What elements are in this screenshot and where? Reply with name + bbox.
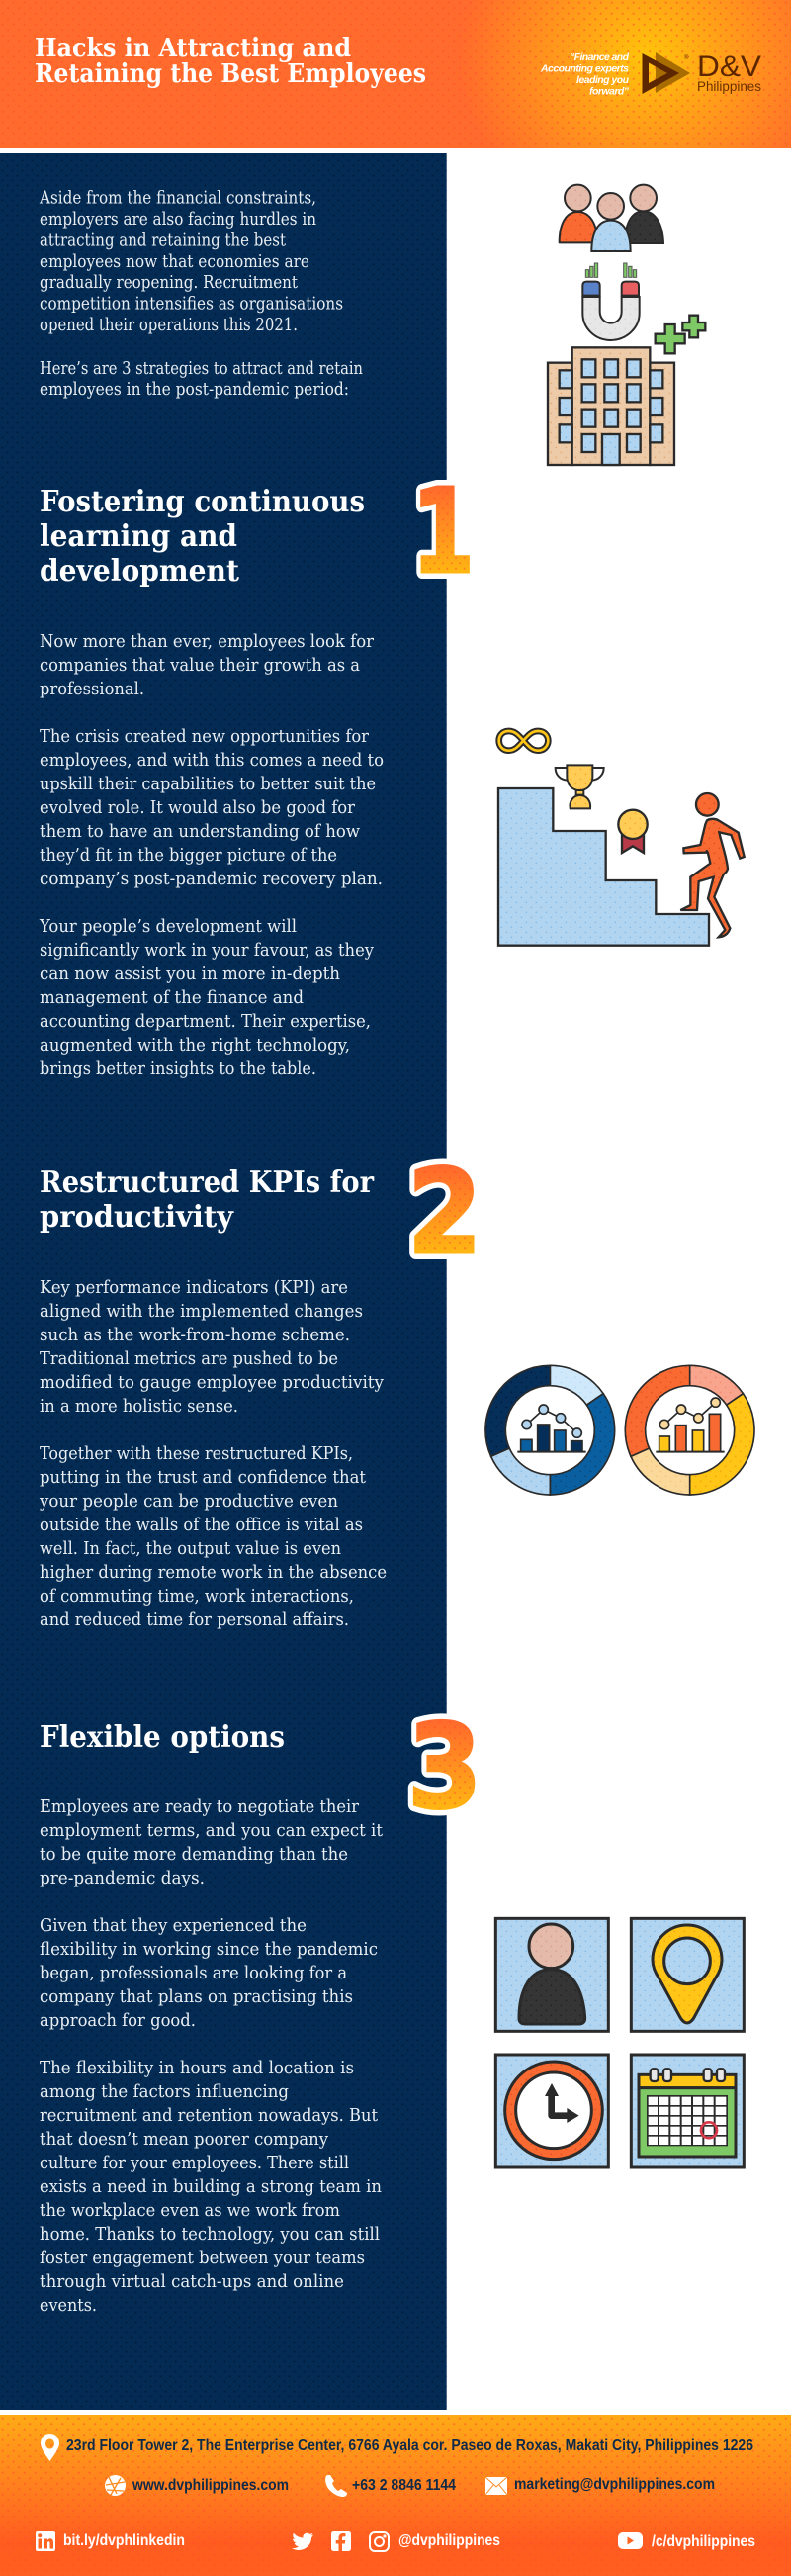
body: section 3: that doesn’t mean poorer company [40,2129,329,2150]
logo: D&V Philippines: Philippines [697,78,761,94]
intro text: employers are also facing hurdles in [40,209,316,230]
body: section 3: foster engagement between your teams [40,2248,365,2268]
intro text: attracting and retaining the best [40,230,287,250]
icon: globe [105,2475,126,2496]
number 3: 3 [407,1700,483,1835]
icon: location pin tile [631,1918,744,2031]
tagline: leading you [576,74,630,86]
icon: phone [325,2475,347,2497]
email: marketing@dvphilippines.com [514,2476,715,2493]
icon: plus signs [656,316,705,353]
heading: section 2: Restructured KPIs for [40,1165,375,1200]
number 1: 1 [411,464,475,599]
number 1: 1 [411,464,475,599]
body: section 1 [39,631,384,1079]
intro text: opened their operations this 2021. [40,315,298,335]
number 3: 3 [407,1700,483,1835]
body: section 1: upskill their capabilities to better suit the [40,774,376,794]
footer band [0,2415,791,2576]
linkedin handle: bit.ly/dvphlinkedin [63,2532,185,2549]
body: section 3: pre-pandemic days. [40,1868,205,1888]
body: section 3: Given that they experienced the [40,1915,307,1936]
number 2: 2 [407,1145,483,1280]
body: section 3: events. [40,2295,97,2316]
body: section 1: company’s post-pandemic recovery plan. [40,869,383,889]
body: section 3: through virtual catch-ups and online [40,2271,344,2292]
body: section 1: significantly work in your favour, as they [40,940,375,961]
panel: navy article column [0,153,447,2410]
heading: section 1: development [40,554,239,589]
title: Retaining the Best Employees [35,59,426,89]
icon: climbing stairs to achievement [498,731,745,946]
body: section 2 [39,1277,387,1630]
logo: D&V Philippines: ® [684,54,689,61]
body: section 2: Traditional metrics are pushed to be [40,1348,338,1369]
body: section 1: accounting department. Their expertise, [40,1011,371,1032]
body: section 1: professional. [40,679,144,699]
chart icon: orange donut with bars [625,1365,754,1495]
icon: mail [485,2477,507,2495]
body: section 1: management of the finance and [40,987,304,1008]
body: section 3: The flexibility in hours and location is [40,2058,354,2078]
intro text [39,188,363,400]
body: section 3: home. Thanks to technology, you can still [40,2224,380,2245]
intro text: Here’s are 3 strategies to attract and retain [40,358,363,379]
body: section 3: began, professionals are looking for a [40,1963,347,1983]
logo: D&V Philippines: D&V [697,50,761,83]
body: section 2: higher during remote work in the absence [40,1562,387,1583]
icon: address pin [41,2434,59,2461]
intro text: employees in the post-pandemic period: [40,379,349,400]
body: section 1: augmented with the right technology, [40,1035,350,1056]
body: section 3: approach for good. [40,2010,196,2031]
title: Hacks in Attracting and [35,34,351,63]
icon: facebook [331,2531,351,2551]
chart icon: blue donut with bars [485,1365,615,1495]
body: section 3: the workplace even as we work from [40,2200,340,2221]
intro text: competition intensifies as organisations [40,293,343,315]
tagline: “Finance and [570,51,630,63]
body: section 2: of commuting time, work interactions, [40,1586,354,1607]
body: section 2: Together with these restructured KPIs, [40,1443,353,1464]
social handle: @dvphilippines [398,2532,500,2549]
body: section 1: companies that value their growth as a [40,655,360,676]
body: section 3 [40,1796,384,2316]
body: section 1: Now more than ever, employees look for [40,631,374,652]
intro text: Aside from the financial constraints, [39,188,316,208]
phone number: +63 2 8846 1144 [352,2477,456,2494]
body: section 1: can now assist you in more in-depth [40,964,340,984]
body: section 2: Key performance indicators (KPI) are [40,1277,348,1298]
icon: stairs [498,788,709,946]
number 3: 3 [407,1700,483,1835]
icon: instagram [370,2532,389,2551]
heading: section 2: productivity [40,1200,235,1235]
heading: section 3: Flexible options [40,1720,285,1755]
body: section 2: modified to gauge employee productivity [40,1372,385,1393]
number 2: 2 [407,1145,483,1280]
number 2: 2 [407,1145,483,1280]
heading: section 1: Fostering continuous [40,485,365,519]
body: section 1: them to have an understanding of how [40,821,361,842]
icons: flexibility grid [495,1918,744,2167]
body: section 3: Employees are ready to negotiate their [40,1796,359,1817]
number 1: 1 [411,464,475,599]
donut ring: orange [625,1365,754,1495]
youtube handle: /c/dvphilippines [652,2533,755,2550]
body: section 1: employees, and with this comes a need to [40,750,384,771]
heading: section 2 [40,1165,375,1235]
body: section 3: employment terms, and you can expect it [40,1820,384,1841]
heading: section 1 [40,485,365,589]
tagline: forward” [589,85,630,97]
intro text: employees now that economies are [40,251,309,272]
icon: infinity [499,731,548,751]
tagline [540,51,630,97]
body: section 2: such as the work-from-home scheme. [40,1325,350,1345]
logo: D&V Philippines [643,50,761,94]
icon: walking person [680,793,745,937]
body: section 3: flexibility in working since the pandemic [40,1939,378,1960]
body: section 3: culture for your employees. There still [40,2153,349,2173]
body: section 1: evolved role. It would also be good for [40,797,355,818]
icon: twitter [292,2533,313,2550]
body: section 1: Your people’s development will [39,916,297,937]
intro text: gradually reopening. Recruitment [40,272,299,293]
icon: linkedin [36,2531,55,2551]
body: section 2: outside the walls of the office is vital as [40,1515,363,1535]
mini bar chart: blue [517,1405,586,1452]
body: section 2: putting in the trust and confidence that [40,1467,367,1488]
mini bar chart: orange [656,1398,725,1452]
website: www.dvphilippines.com [132,2477,289,2494]
tagline: Accounting experts [540,63,629,75]
body: section 3: exists a need in building a strong team in [40,2176,382,2197]
icon: team, magnet and office building [548,185,705,465]
icon: office building [548,347,674,465]
icon: trophy [556,765,604,808]
title [35,34,426,89]
icon: person tile [495,1918,608,2031]
icon: youtube [618,2532,643,2549]
body: section 2: aligned with the implemented changes [40,1301,363,1322]
icon: medal [618,810,648,853]
body: section 1: they’d fit in the bigger picture of the [40,845,337,866]
body: section 2: and reduced time for personal affairs. [40,1610,349,1630]
icon: three people [560,185,663,251]
body: section 1: brings better insights to the table. [40,1058,316,1079]
icon: calendar tile [631,2055,744,2167]
body: section 3: company that plans on practising this [40,1986,353,2007]
body: section 2: in a more holistic sense. [40,1396,238,1417]
body: section 3: recruitment and retention nowadays. But [40,2105,379,2126]
body: section 3: among the factors influencing [40,2081,289,2102]
body: section 2: well. In fact, the output value is even [40,1538,341,1559]
donut ring: blue [485,1365,615,1495]
body: section 2: your people can be productive even [39,1491,338,1512]
heading: section 1: learning and [40,519,237,554]
header banner [0,0,791,148]
body: section 3: to be quite more demanding than the [40,1844,348,1865]
icon: clock tile [495,2055,608,2167]
body: section 1: The crisis created new opportunities for [40,726,369,747]
icon: magnet [582,263,640,340]
